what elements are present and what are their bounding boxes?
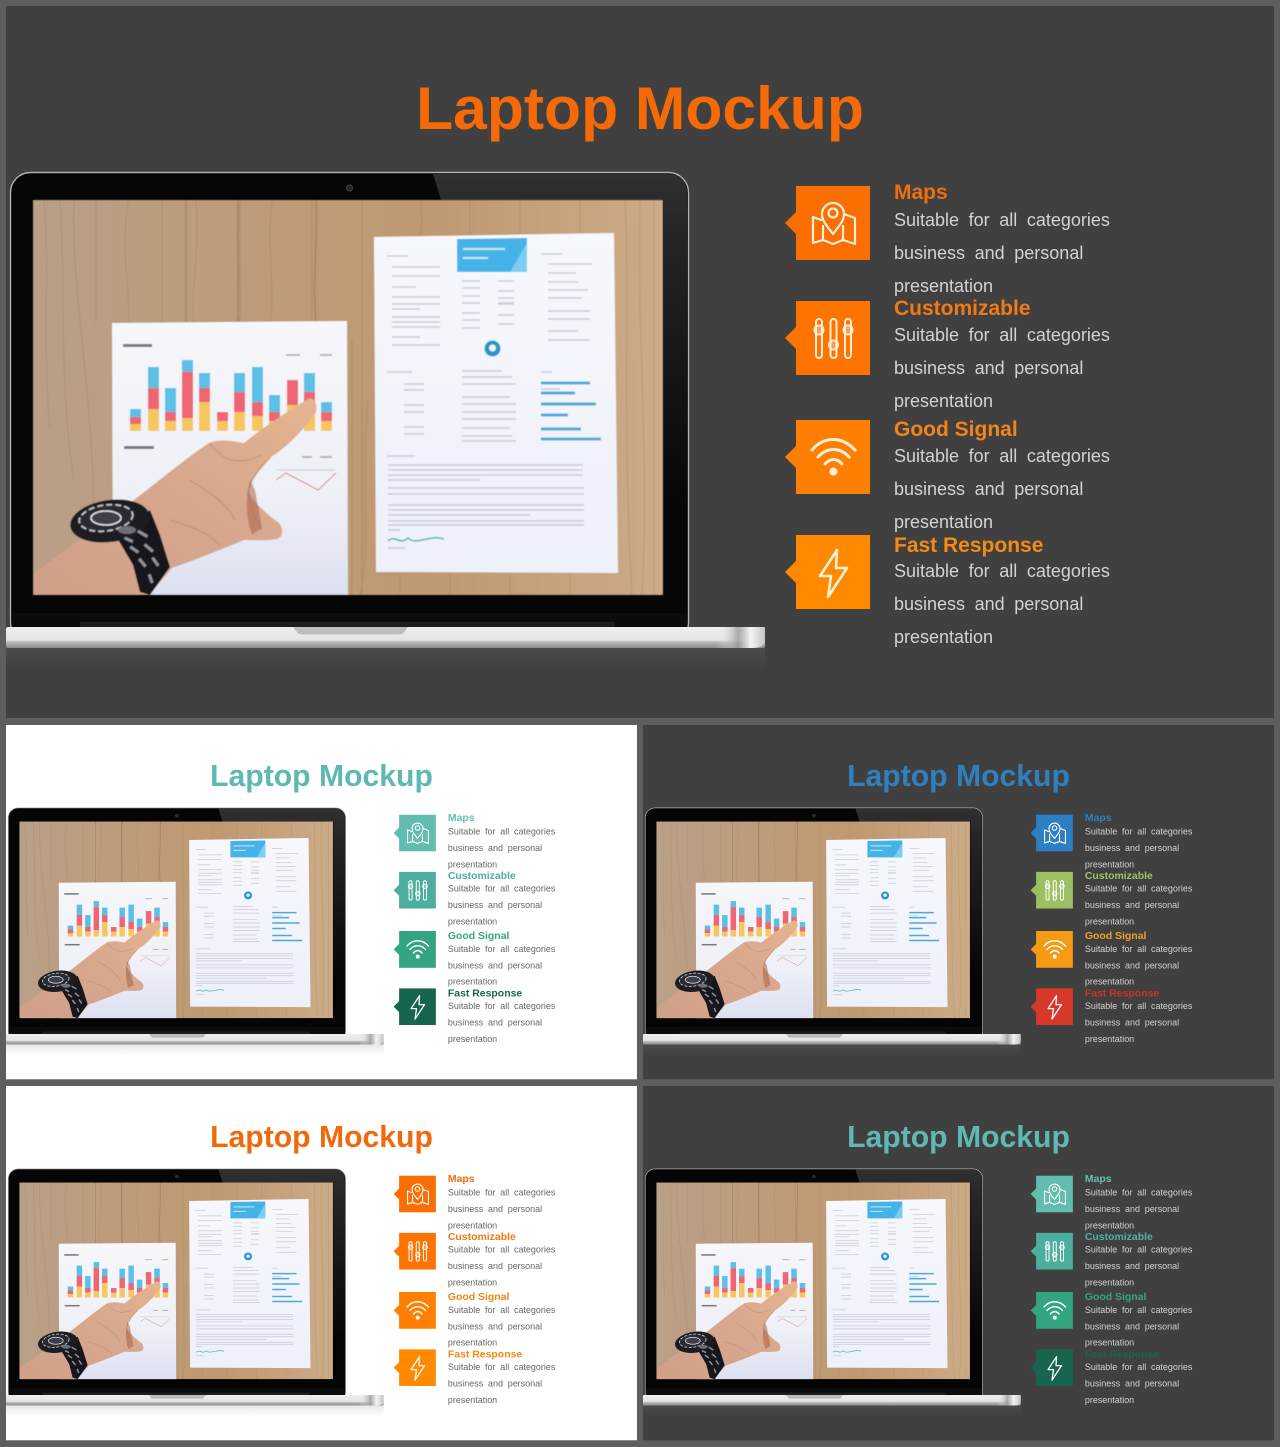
heading: Good Signal: Good Signal (448, 930, 509, 941)
title: Laptop Mockup (847, 1120, 1070, 1154)
icon: wifi (394, 1292, 436, 1329)
text: Fast Response description: Suitable for all categories (894, 561, 1110, 581)
text: Good Signal description: Suitable for all categories (448, 944, 555, 954)
text: Fast Response description: Suitable for all categories (1085, 1001, 1192, 1011)
laptop illustration (6, 808, 384, 1052)
icon: lightning bolt (394, 988, 436, 1025)
text: Fast Response description (1085, 1359, 1192, 1409)
text: Good Signal description (1085, 1302, 1192, 1352)
icon: wifi (394, 931, 436, 968)
heading: Maps: Maps (1085, 812, 1112, 824)
icon: lightning bolt (394, 1349, 436, 1386)
text: Good Signal description: business and personal (894, 479, 1083, 499)
panel: multicolor slide on dark background (643, 725, 1274, 1079)
text: Good Signal description: business and personal (1085, 1321, 1179, 1331)
text: Maps description (1085, 827, 1192, 870)
heading: Fast Response: Fast Response (448, 1349, 522, 1360)
text: Fast Response description: Suitable for all categories (448, 1001, 555, 1011)
title: Laptop Mockup (416, 74, 864, 142)
text: Fast Response description (448, 1001, 555, 1044)
icon: lightning bolt (785, 535, 870, 609)
icon: map (1030, 1176, 1073, 1212)
text: Customizable description: Suitable for all categories (894, 325, 1110, 345)
text: Customizable description: Suitable for all categories (1085, 1245, 1192, 1255)
text: Customizable description (894, 325, 1110, 411)
text: Maps description: presentation (894, 276, 993, 296)
text: Good Signal description: Suitable for all categories (1085, 944, 1192, 954)
text: Fast Response description: presentation (1085, 1395, 1134, 1405)
text: Fast Response description: presentation (894, 627, 993, 647)
text: Customizable description: presentation (1085, 917, 1134, 927)
text: Maps description: presentation (1085, 1221, 1134, 1231)
icon: map (1030, 814, 1073, 852)
heading: Maps: Maps (1085, 1173, 1112, 1185)
icon: map (394, 1176, 436, 1212)
laptop illustration (643, 808, 1021, 1048)
icon: sliders (785, 301, 870, 375)
text: Good Signal description: presentation (894, 512, 993, 532)
text: Maps description (894, 210, 1110, 296)
text: Customizable description: business and personal (448, 900, 542, 910)
heading: Customizable: Customizable (1085, 1231, 1153, 1242)
text: Maps description: Suitable for all categories (894, 210, 1110, 230)
text: Maps description: business and personal (894, 243, 1083, 263)
text: Fast Response description: business and personal (448, 1018, 542, 1028)
text: Fast Response description: business and personal (448, 1379, 542, 1389)
text: Good Signal description: presentation (448, 1338, 497, 1348)
icon: map (785, 186, 870, 260)
heading: Customizable: Customizable (894, 297, 1031, 320)
heading: Good Signal: Good Signal (448, 1291, 509, 1302)
text: Fast Response description: presentation (448, 1395, 497, 1405)
icon: sliders (1030, 1232, 1073, 1270)
text: Maps description: business and personal (448, 1204, 542, 1214)
text: Customizable description: presentation (1085, 1278, 1134, 1288)
text: Customizable description: Suitable for all categories (448, 884, 555, 894)
text: Fast Response description: Suitable for all categories (448, 1362, 555, 1372)
text: Good Signal description: presentation (1085, 977, 1134, 987)
heading: Maps: Maps (894, 181, 948, 204)
text: Maps description (448, 827, 555, 870)
text: Maps description: presentation (448, 860, 497, 870)
text: Customizable description (448, 884, 555, 927)
text: Customizable description: presentation (448, 1278, 497, 1288)
text: Customizable description: Suitable for all categories (1085, 884, 1192, 894)
text: Maps description: presentation (448, 1221, 497, 1231)
heading: Good Signal: Good Signal (1085, 1291, 1146, 1302)
text: Good Signal description: presentation (1085, 1338, 1134, 1348)
heading: Good Signal: Good Signal (1085, 930, 1146, 941)
text: Customizable description (448, 1245, 555, 1288)
text: Maps description: Suitable for all categories (448, 1188, 555, 1197)
icon: lightning bolt (1030, 988, 1073, 1025)
text: Fast Response description: business and personal (1085, 1018, 1179, 1028)
text: Maps description: business and personal (1085, 843, 1179, 853)
laptop illustration (6, 1168, 384, 1412)
heading: Fast Response: Fast Response (894, 534, 1043, 557)
panel: teal slide on white background (6, 725, 637, 1079)
heading: Good Signal: Good Signal (894, 418, 1018, 441)
text: Good Signal description: Suitable for all categories (1085, 1305, 1192, 1315)
text: Fast Response description: presentation (1085, 1034, 1134, 1044)
heading: Maps: Maps (448, 1173, 475, 1185)
text: Maps description: Suitable for all categories (1085, 1188, 1192, 1197)
text: Maps description: presentation (1085, 860, 1134, 870)
heading: Customizable: Customizable (448, 1231, 516, 1242)
icon: lightning bolt (1031, 1349, 1073, 1386)
text: Customizable description: presentation (894, 391, 993, 411)
text: Good Signal description: business and personal (448, 960, 542, 970)
icon: sliders (1030, 872, 1073, 908)
text: Good Signal description (1085, 944, 1192, 987)
text: Fast Response description (894, 561, 1110, 647)
text: Good Signal description: business and personal (1085, 960, 1179, 970)
laptop illustration (6, 172, 765, 654)
text: Maps description (448, 1188, 555, 1231)
title: Laptop Mockup (210, 759, 433, 793)
text: Customizable description: business and personal (894, 358, 1083, 378)
panel: orange slide on white background (6, 1086, 637, 1440)
text: Fast Response description: business and personal (894, 594, 1083, 614)
panel: large orange slide on dark background (6, 6, 1274, 718)
heading: Fast Response: Fast Response (1085, 1349, 1159, 1360)
text: Fast Response description: presentation (448, 1034, 497, 1044)
icon: wifi (785, 420, 870, 494)
text: Customizable description: business and personal (1085, 900, 1179, 910)
text: Good Signal description (894, 446, 1110, 532)
text: Good Signal description: presentation (448, 977, 497, 987)
text: Customizable description: presentation (448, 917, 497, 927)
icon: map (394, 814, 436, 852)
title: Laptop Mockup (847, 759, 1070, 793)
text: Good Signal description: business and personal (448, 1321, 542, 1331)
text: Maps description: business and personal (1085, 1204, 1179, 1214)
text: Good Signal description (448, 944, 555, 987)
heading: Fast Response: Fast Response (448, 988, 522, 999)
icon: wifi (1031, 1292, 1073, 1329)
heading: Customizable: Customizable (448, 870, 516, 881)
text: Customizable description (1085, 884, 1192, 927)
icon: sliders (394, 1232, 436, 1270)
title: Laptop Mockup (210, 1120, 433, 1154)
text: Maps description: Suitable for all categories (448, 827, 555, 836)
text: Fast Response description: Suitable for all categories (1085, 1362, 1192, 1372)
text: Maps description: Suitable for all categories (1085, 827, 1192, 836)
heading: Customizable: Customizable (1085, 870, 1153, 881)
text: Customizable description (1085, 1242, 1192, 1291)
text: Maps description (1085, 1188, 1192, 1231)
text: Good Signal description (448, 1305, 555, 1348)
text: Fast Response description (1085, 1001, 1192, 1044)
icon: wifi (1030, 931, 1073, 968)
text: Customizable description: business and personal (1085, 1261, 1179, 1271)
text: Good Signal description: Suitable for all categories (448, 1305, 555, 1315)
panel: teal slide on dark background (643, 1086, 1274, 1440)
text: Customizable description: business and personal (448, 1261, 542, 1271)
heading: Fast Response: Fast Response (1085, 988, 1159, 999)
text: Good Signal description: Suitable for all categories (894, 446, 1110, 466)
text: Fast Response description (448, 1362, 555, 1405)
icon: sliders (394, 872, 436, 909)
laptop illustration (643, 1168, 1021, 1408)
heading: Maps: Maps (448, 812, 475, 824)
text: Customizable description: Suitable for all categories (448, 1245, 555, 1255)
text: Maps description: business and personal (448, 843, 542, 853)
text: Fast Response description: business and personal (1085, 1379, 1179, 1389)
